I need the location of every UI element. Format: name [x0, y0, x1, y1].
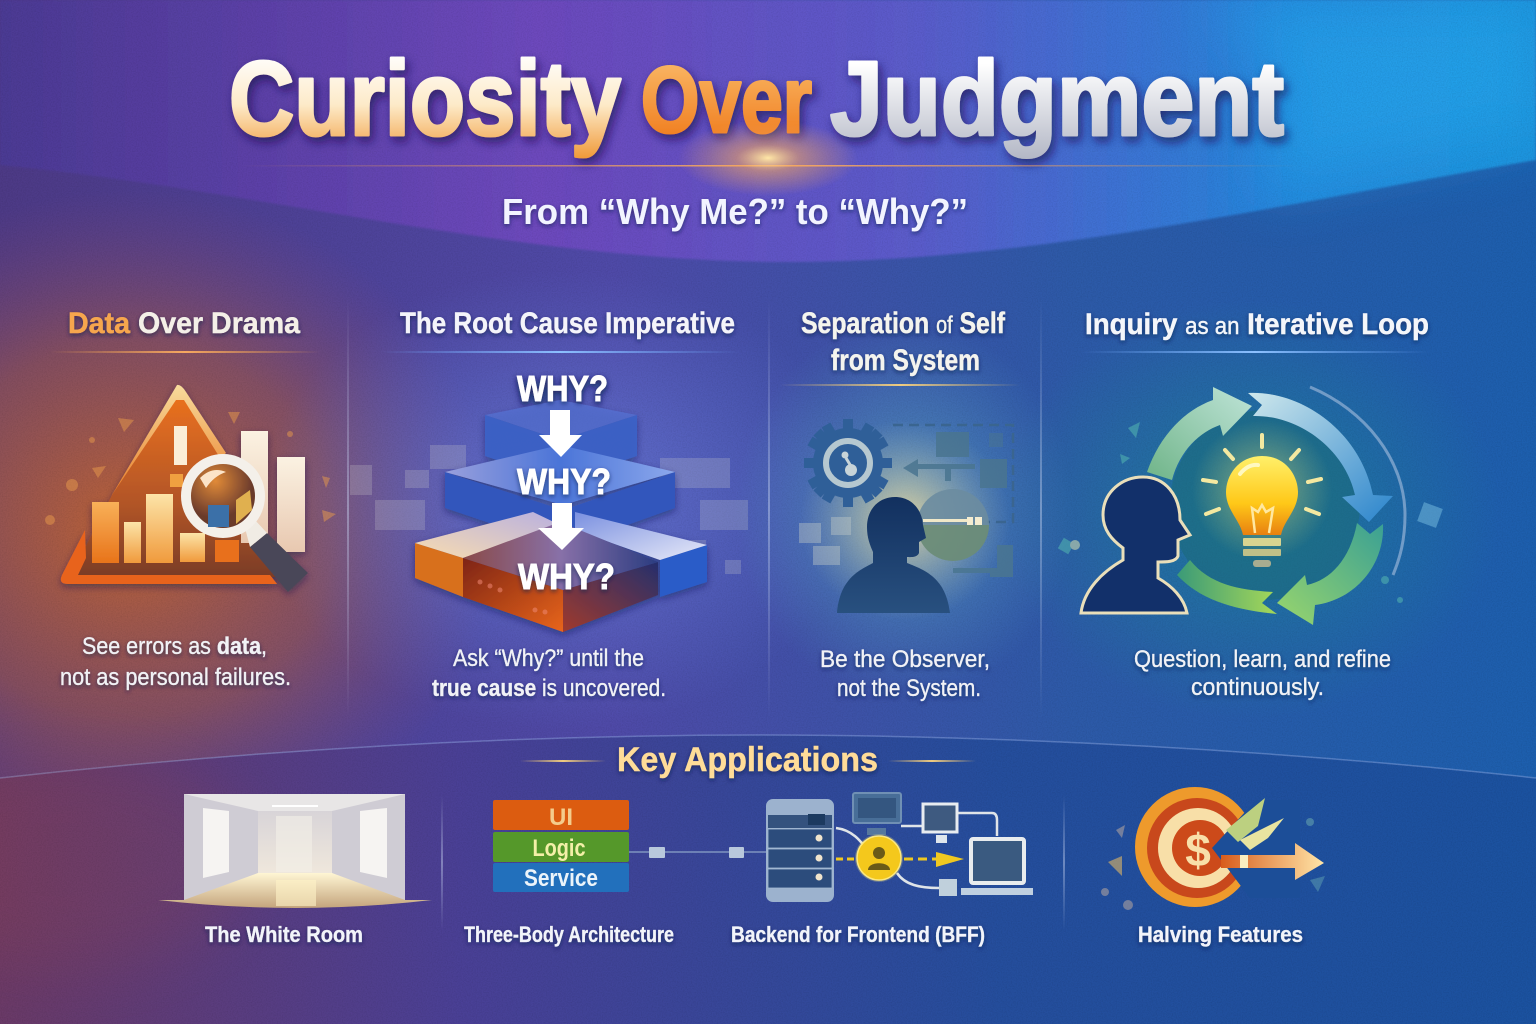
icon: layered stack: UI	[549, 804, 573, 831]
heading: Key Applications: Key Applications	[617, 741, 878, 779]
body text	[432, 645, 666, 702]
title: Curiosity	[229, 40, 621, 158]
title: Over	[641, 47, 812, 152]
body text: Question, learn, and refine	[1134, 646, 1391, 673]
icon: observer with gear and system diagram	[799, 419, 1013, 620]
why labels: WHY?	[517, 368, 608, 409]
heading: Data Over Drama: Over Drama	[138, 307, 300, 340]
icon: white room	[158, 794, 432, 908]
icon: warning triangle with bars and magnifier	[61, 385, 308, 592]
heading: from System	[831, 344, 980, 377]
label: The White Room	[205, 922, 363, 947]
why labels: WHY?	[517, 461, 611, 502]
label: Halving Features	[1138, 922, 1303, 947]
icon: stacked why layers	[415, 368, 707, 632]
label: Backend for Frontend (BFF)	[731, 922, 985, 947]
connector	[629, 847, 766, 858]
icon: head, light bulb and loop arrows	[1058, 387, 1443, 625]
body text	[60, 633, 291, 691]
body text: Be the Observer,	[820, 646, 990, 673]
body text: true cause is uncovered.	[432, 675, 666, 702]
why labels	[517, 368, 615, 597]
body text: See errors as data,	[82, 633, 267, 660]
title: Judgment	[830, 40, 1284, 158]
title underline glow	[240, 120, 1300, 196]
why labels: WHY?	[518, 556, 615, 597]
icon: layered stack: Service	[524, 865, 598, 892]
icon: layered stack: Logic	[532, 835, 586, 862]
title	[229, 40, 1284, 158]
head silhouette	[1081, 477, 1190, 613]
decorative particles	[45, 412, 336, 525]
application: The White Room	[158, 794, 432, 947]
decorative faded blocks	[350, 445, 748, 574]
panel: Separation of Self from System	[780, 307, 1020, 702]
heading	[801, 307, 1006, 377]
icon: target with arrow	[1135, 787, 1324, 907]
heading: The Root Cause Imperative	[400, 307, 735, 340]
heading: Inquiry as an Iterative Loop	[1085, 308, 1429, 341]
panel: The Root Cause Imperative	[350, 307, 748, 702]
heading: Separation of Self	[801, 307, 1006, 340]
body text	[820, 646, 990, 702]
body text: not as personal failures.	[60, 664, 291, 691]
panel: Data Over Drama	[45, 307, 336, 691]
panel: Inquiry as an Iterative Loop	[1058, 308, 1443, 701]
column dividers	[347, 298, 1065, 930]
body text: not the System.	[837, 675, 981, 702]
body text: Ask “Why?” until the	[453, 645, 644, 672]
body text	[1134, 646, 1391, 701]
heading: Data Over Drama	[68, 307, 300, 340]
icon: target with arrow: $	[1185, 824, 1211, 876]
icon: layered stack	[493, 800, 629, 892]
gear	[804, 419, 892, 507]
label: Three-Body Architecture	[464, 922, 674, 947]
body text: continuously.	[1191, 674, 1324, 701]
application: Three-Body Architecture	[464, 800, 766, 947]
particles	[1058, 422, 1443, 603]
bulb	[1226, 456, 1298, 535]
application: Halving Features	[1101, 787, 1325, 947]
application: Backend for Frontend	[731, 793, 1033, 947]
arrows	[538, 410, 584, 550]
heading: Data Over Drama: Data	[68, 307, 130, 340]
decorative particles	[1101, 818, 1325, 910]
icon: server, gateway and clients	[766, 793, 1033, 902]
subtitle: From “Why Me?” to “Why?”	[502, 191, 968, 232]
